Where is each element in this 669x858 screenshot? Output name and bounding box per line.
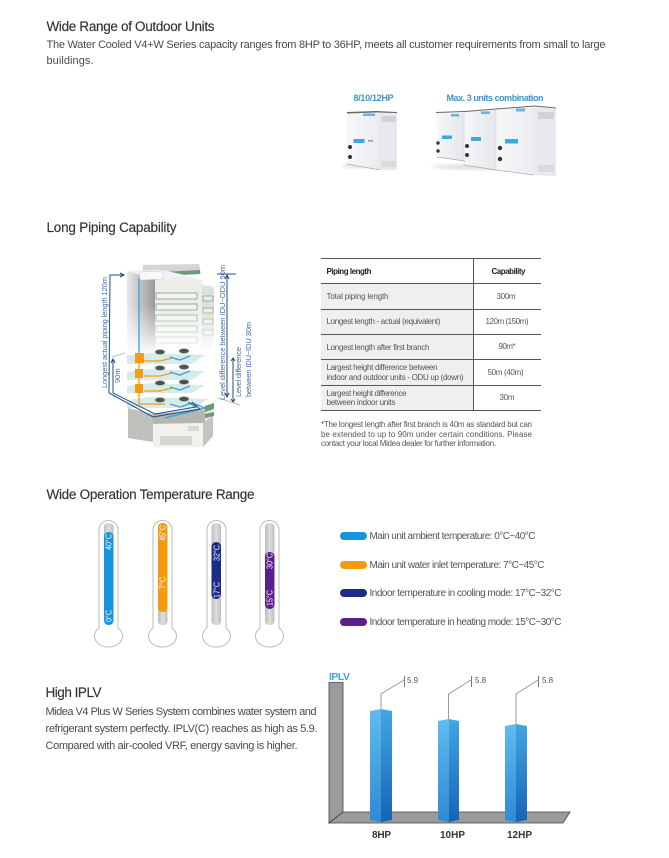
chart back wall [329, 682, 343, 823]
legend: water inlet temperature: Main unit water inlet temperature: 7°C~45°C [370, 560, 544, 571]
leader: 5.8 at 10HP: 5.8 [475, 676, 487, 685]
text block: IPLV description: refrigerant system perfectly. IPLV(C) reaches as high as 5.9. [46, 723, 318, 735]
text block: outdoor units description: The Water Cooled V4+W Series capacity ranges from 8HP to 36HP, meets all customer requirements from small to large [46, 39, 606, 51]
lower building block [128, 403, 214, 447]
label: level difference IDU-IDU: Level difference [234, 347, 243, 397]
category labels: 10HP [440, 830, 465, 841]
thermometer: indoor cooling: 32°C [212, 545, 222, 561]
leader: 5.9 [381, 676, 419, 709]
heading: High IPLV: High IPLV [46, 685, 102, 700]
legend: cooling temperature: Indoor temperature in cooling mode: 17°C~32°C [370, 588, 562, 599]
text block: IPLV description [46, 706, 318, 752]
table: piping capability [321, 258, 541, 411]
table row: longest length actual [326, 317, 529, 326]
leader: 5.8 at 10HP [448, 676, 487, 719]
thermometer: main unit ambient: 0°C [104, 610, 114, 622]
legend: ambient temperature: Main unit ambient temperature: 0°C~40°C [370, 531, 536, 542]
leader: 5.8 at 12HP [516, 676, 554, 724]
thermometer: water inlet: 45°C [158, 525, 168, 541]
label: level difference IDU-ODU: Level difference between IDU~ODU 50m [218, 265, 227, 400]
label: level difference IDU-IDU [234, 322, 253, 397]
table row: longest length after first branch: Longest length after first branch [326, 343, 430, 352]
table row: largest height difference ODU [326, 363, 524, 382]
leader: 5.9: 5.9 [407, 676, 419, 685]
bar: 12HP [505, 724, 527, 822]
table row: largest height difference ODU: indoor and outdoor units - ODU up (down) [326, 373, 464, 382]
label: 90m: 90m [113, 368, 122, 383]
thermometer: water inlet [148, 520, 176, 647]
illustration: three combined outdoor units [432, 106, 556, 176]
thermometer: indoor cooling: 17°C [212, 582, 222, 598]
text block: IPLV description: Midea V4 Plus W Series System combines water system and [46, 706, 316, 718]
heading: Wide Operation Temperature Range: Wide Operation Temperature Range [46, 487, 254, 502]
legend: heating temperature: Indoor temperature in heating mode: 15°C~30°C [370, 617, 562, 628]
thermometer: indoor heating: 15°C [266, 590, 274, 606]
piping length route arrows [109, 273, 236, 417]
table shaded rows [321, 284, 473, 410]
chart floor [329, 812, 570, 823]
table row: largest height difference indoor: 30m [500, 393, 515, 402]
footnote: contact your local Midea dealer for further information. [321, 439, 496, 448]
footnote [321, 420, 533, 448]
text block: IPLV description: Compared with air-cooled VRF, energy saving is higher. [46, 740, 298, 752]
bar: 10HP [438, 719, 459, 822]
footnote: be extended to up to 90m under certain conditions. Please [321, 430, 533, 439]
label: level difference IDU-IDU: between IDU~IDU 30m [244, 322, 253, 397]
table row: largest height difference indoor: Largest height difference [326, 389, 407, 398]
thermometer: indoor heating: 30°C [266, 553, 274, 569]
building tower [125, 264, 220, 356]
text block: outdoor units description [46, 39, 606, 67]
category labels [372, 830, 532, 841]
refrigerant and water pipes [139, 278, 205, 418]
table row: largest height difference indoor [326, 389, 515, 407]
bar chart: IPLV [329, 671, 570, 841]
piping junctions [135, 353, 144, 393]
table row: largest height difference indoor: between indoor units [326, 398, 396, 407]
illustration: building piping diagram [100, 264, 253, 447]
chart axis label: IPLV [329, 671, 350, 683]
thermometer: indoor heating [255, 520, 284, 647]
table row: total piping length [326, 292, 516, 301]
table row: largest height difference ODU: Largest height difference between [326, 363, 438, 372]
level reference lines [112, 353, 240, 405]
table row: longest length actual: Longest length - actual (equivalent) [326, 317, 441, 326]
table header: Piping length [326, 267, 372, 276]
text block: outdoor units description: buildings. [46, 55, 94, 67]
label: longest actual piping length: Longest actual piping length 120m [100, 277, 109, 388]
table row: total piping length: 300m [496, 292, 516, 301]
leader: 5.8 at 12HP: 5.8 [542, 676, 554, 685]
table row: largest height difference ODU: 50m (40m) [488, 368, 524, 377]
table row: total piping length: Total piping length [326, 292, 388, 301]
table row: longest length actual: 120m (150m) [486, 317, 529, 326]
bar: 8HP [370, 709, 392, 822]
table row: longest length after first branch [326, 342, 516, 352]
illustration: single outdoor unit [342, 111, 397, 170]
label: Max. 3 units combination: Max. 3 units combination [446, 93, 544, 103]
thermometer: main unit ambient: 40°C [104, 534, 114, 550]
heading: Wide Range of Outdoor Units: Wide Range of Outdoor Units [46, 19, 215, 34]
thermometer: main unit ambient [94, 520, 122, 647]
label: 8/10/12HP: 8/10/12HP [354, 93, 394, 103]
table row: longest length after first branch: 90m* [498, 342, 516, 351]
category labels: 8HP [372, 830, 391, 841]
footnote: *The longest length after first branch is 40m as standard but can [321, 420, 532, 429]
category labels: 12HP [507, 830, 532, 841]
indoor units [155, 348, 189, 402]
table header [326, 267, 526, 276]
thermometer: indoor cooling [203, 520, 231, 647]
table header: Capability [492, 267, 526, 276]
heading: Long Piping Capability: Long Piping Capability [46, 220, 177, 235]
thermometer: water inlet: 7°C [158, 577, 168, 589]
floor plates [127, 353, 208, 408]
